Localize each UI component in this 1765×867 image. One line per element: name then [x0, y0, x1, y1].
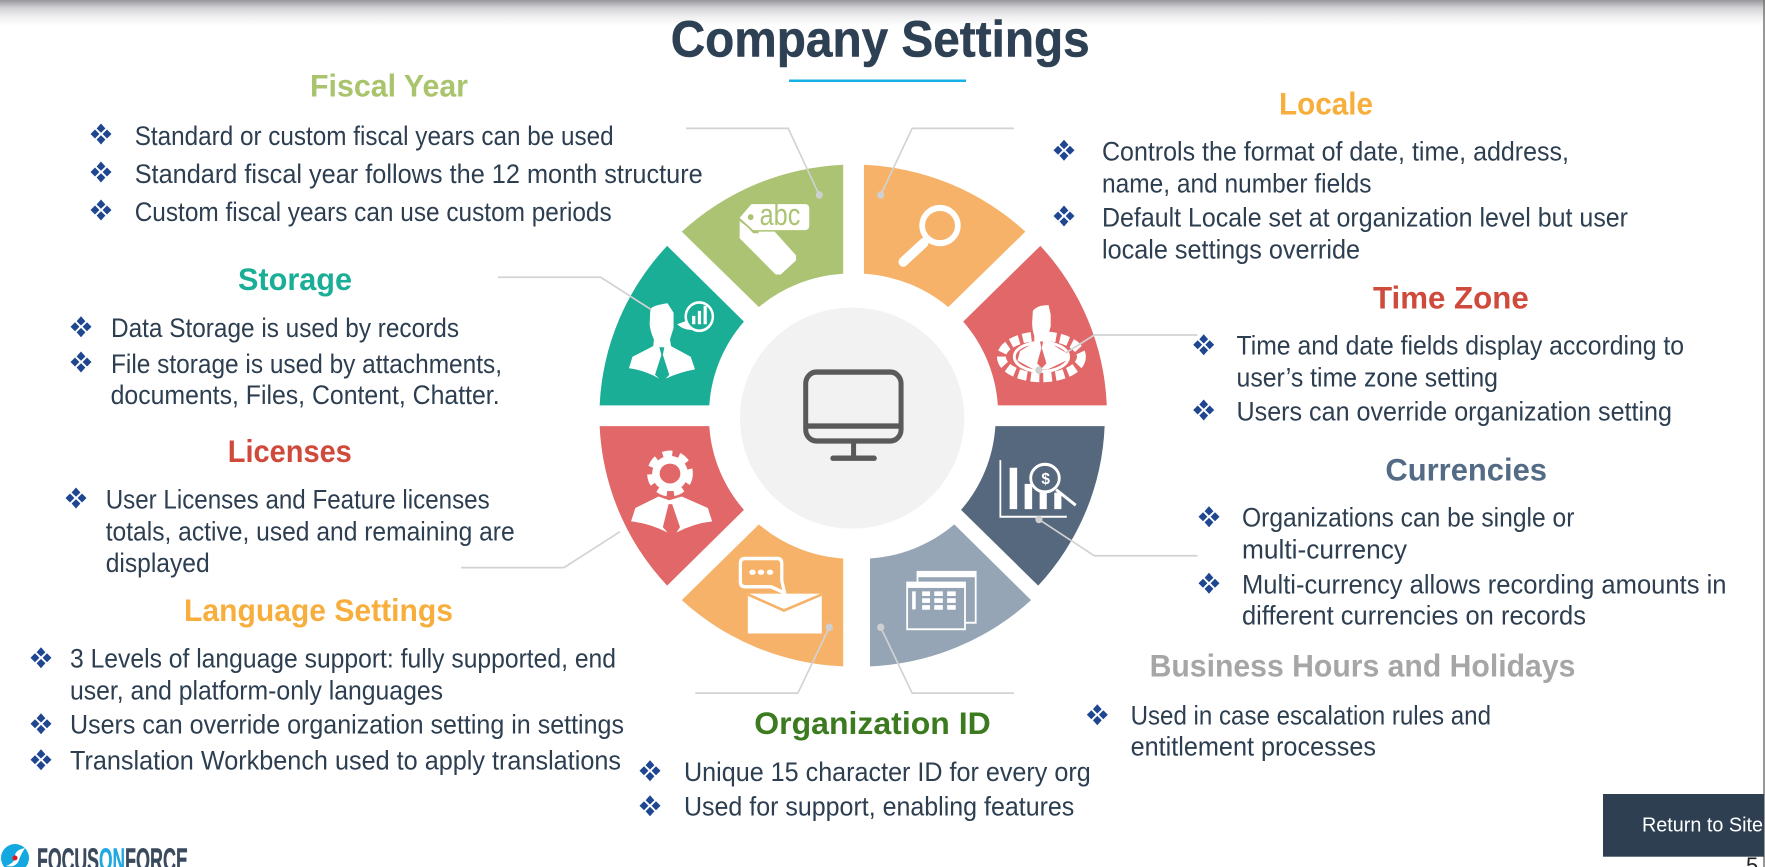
return to site button: [1603, 794, 1764, 857]
wheel diagram: [461, 128, 1197, 693]
center circle: [740, 307, 964, 529]
panel: organization id: Used for support, enabling features: [684, 792, 1074, 822]
icon: calendar windows: [907, 572, 976, 629]
heading: language settings: Language Settings: [184, 592, 453, 628]
panel: fiscal year: [90, 68, 703, 227]
panel: currencies: Organizations can be single or: [1242, 503, 1575, 533]
panel: currencies: multi-currency: [1242, 535, 1408, 565]
icon: abc tag: [740, 198, 809, 275]
segment: locale: [864, 165, 1025, 307]
title: Company Settings: [671, 11, 1090, 68]
segment: storage: [600, 246, 744, 405]
title underline: [789, 80, 966, 82]
panel: licenses: totals, active, used and remaining are: [106, 517, 515, 547]
icon: person with ring: [1001, 305, 1081, 377]
connector: storage: [498, 277, 651, 310]
segment: fiscal year: [682, 165, 843, 307]
heading: time zone: Time Zone: [1373, 279, 1529, 315]
panel: storage: File storage is used by attachments,: [111, 349, 502, 379]
connector: business hours: [877, 624, 1014, 693]
panel: time zone: Time and date fields display according to: [1236, 331, 1684, 361]
panel: business hours and holidays: [1087, 648, 1575, 761]
panel: organization id: [640, 705, 1091, 822]
panel: fiscal year: Custom fiscal years can use custom periods: [135, 197, 612, 227]
panel: language settings: user, and platform-only languages: [70, 676, 443, 706]
connector: fiscal year: [686, 128, 823, 199]
icon: abc tag: abc: [760, 198, 801, 232]
panel: organization id: Unique 15 character ID for every org: [684, 757, 1091, 787]
panel: locale: locale settings override: [1102, 235, 1360, 265]
icon: chart with dollar magnifier: $: [1041, 470, 1050, 488]
heading: business hours and holidays: Business Hours and Holidays: [1150, 648, 1575, 684]
connector: locale: [877, 128, 1014, 199]
heading: licenses: Licenses: [228, 433, 352, 469]
connector: time zone: [1035, 335, 1197, 374]
panel: storage: [70, 261, 502, 410]
panel: fiscal year: Standard or custom fiscal years can be used: [135, 121, 614, 151]
panel: locale: Controls the format of date, time, address,: [1102, 137, 1569, 167]
panel: time zone: Users can override organization setting: [1236, 397, 1672, 427]
segment: business hours: [870, 524, 1031, 666]
panel: fiscal year: Standard fiscal year follows the 12 month structure: [135, 159, 703, 189]
icon: envelope with speech bubble: [740, 558, 822, 633]
panel: licenses: [66, 433, 515, 578]
connector: currencies: [1035, 516, 1197, 556]
panel: business hours and holidays: entitlement processes: [1131, 731, 1376, 761]
segment: organization id: [682, 524, 843, 666]
segment: time zone: [963, 246, 1107, 405]
panel: licenses: displayed: [106, 548, 210, 578]
return to site button: Return to Site: [1642, 815, 1763, 837]
panel: storage: documents, Files, Content, Chatter.: [111, 380, 500, 410]
panel: language settings: 3 Levels of language support: fully supported, end: [70, 644, 616, 674]
panel: locale: [1054, 85, 1628, 265]
panel: time zone: user’s time zone setting: [1236, 363, 1498, 393]
heading: organization id: Organization ID: [754, 705, 991, 741]
heading: storage: Storage: [238, 261, 352, 297]
segment: licenses: [600, 426, 744, 586]
icon: monitor: [806, 372, 901, 458]
panel: time zone: [1193, 279, 1684, 427]
heading: currencies: Currencies: [1385, 451, 1547, 487]
panel: currencies: [1198, 451, 1726, 630]
segment: currencies: [961, 426, 1105, 586]
panel: currencies: Multi-currency allows recording amounts in: [1242, 570, 1726, 600]
icon: magnifier: [903, 208, 958, 262]
panel: locale: name, and number fields: [1102, 169, 1372, 199]
panel: language settings: Users can override organization setting in settings: [70, 710, 624, 740]
heading: locale: Locale: [1279, 85, 1373, 121]
icon: chart with dollar magnifier: [1000, 460, 1076, 517]
icon: person with chart bubble: [629, 302, 713, 379]
logo: focus on force: [1, 842, 188, 867]
panel: licenses: User Licenses and Feature licenses: [106, 485, 490, 515]
panel: currencies: different currencies on records: [1242, 600, 1586, 630]
panel: language settings: [30, 592, 624, 776]
icon: person with gear: [631, 454, 712, 532]
panel: storage: Data Storage is used by records: [111, 313, 459, 343]
panel: locale: Default Locale set at organization level but user: [1102, 203, 1628, 233]
heading: fiscal year: Fiscal Year: [310, 68, 468, 104]
panel: business hours and holidays: Used in case escalation rules and: [1131, 701, 1491, 731]
connector: organization id: [695, 624, 833, 693]
panel: language settings: Translation Workbench used to apply translations: [70, 746, 621, 776]
